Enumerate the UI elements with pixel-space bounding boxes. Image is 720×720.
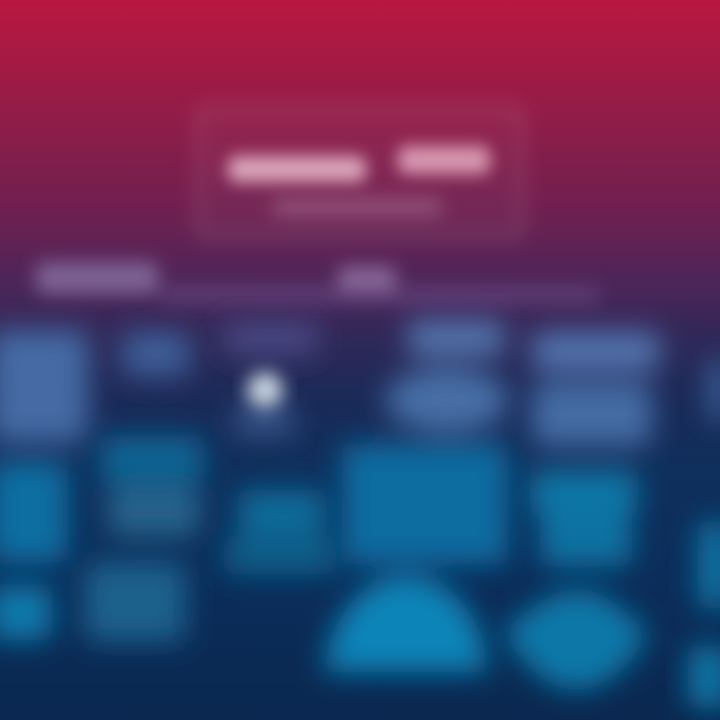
title panel [198,108,522,236]
subtitle text [272,198,442,216]
column 5 cards [502,332,660,690]
column 2 cards [84,332,204,642]
icon: bright dot [247,372,283,408]
section headings and connector [36,262,600,304]
column 1 cards [0,330,88,640]
column 3 cards [224,322,336,574]
title text [228,146,490,182]
right edge cards [688,360,720,708]
column 4 cards [324,320,509,672]
